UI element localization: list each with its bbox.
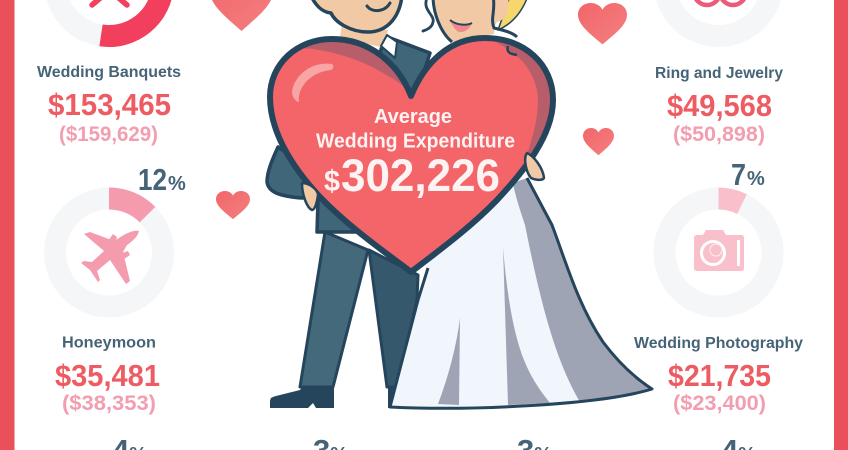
donut: jewelry share [664,0,772,36]
label: wedding photography: Wedding Photography [634,335,803,352]
amount: jewelry: $49,568 [667,88,772,123]
donut: honeymoon share [55,198,163,306]
previous amount: jewelry: ($50,898) [673,123,765,146]
groom jacket [267,36,430,232]
icon: airplane [81,231,139,284]
donut: photography share [664,198,772,306]
percent: 7: 7% [731,157,765,192]
icon: camera [694,230,744,271]
icon: rings [694,0,746,5]
hand left [302,183,318,210]
amount: banquets: $153,465 [48,87,171,122]
right border [834,0,848,450]
text: wedding expenditure: Wedding Expenditure [316,130,515,152]
groom shoes [270,387,400,408]
donut: banquets share [55,0,163,36]
left border [0,0,14,450]
icon: floating heart top left [210,0,273,31]
icon: floating heart left [216,191,250,219]
bride hair and head [423,0,528,42]
icon: floating heart right [583,128,614,155]
groom legs [300,232,418,387]
heart title: 302,226 [341,150,500,201]
panel: ring and jewelry [655,0,783,146]
panel: wedding photography [634,157,803,415]
icon: banquet cutlery [92,0,127,5]
heart title [316,106,515,201]
amount: honeymoon: $35,481 [55,358,160,393]
bride dress [390,178,652,408]
amount: photography: $21,735 [668,358,771,393]
percent: 12: 12% [138,162,186,197]
bottom percentages [112,433,756,450]
big heart [270,38,553,272]
total amount: $ [324,165,340,198]
hand right [525,153,544,180]
previous amount: honeymoon: ($38,353) [62,392,156,415]
panel: honeymoon [55,162,186,415]
label: ring and jewelry: Ring and Jewelry [655,65,783,82]
label: honeymoon: Honeymoon [62,334,156,352]
groom neck, collar and head [311,0,402,58]
text: average: Average [374,106,452,128]
icon: floating heart top right [578,3,627,44]
previous amount: banquets: ($159,629) [59,123,158,146]
panel: wedding banquets [37,0,181,146]
label: wedding banquets: Wedding Banquets [37,64,181,81]
previous amount: photography: ($23,400) [673,392,766,415]
illustration: bride and groom [267,0,652,408]
